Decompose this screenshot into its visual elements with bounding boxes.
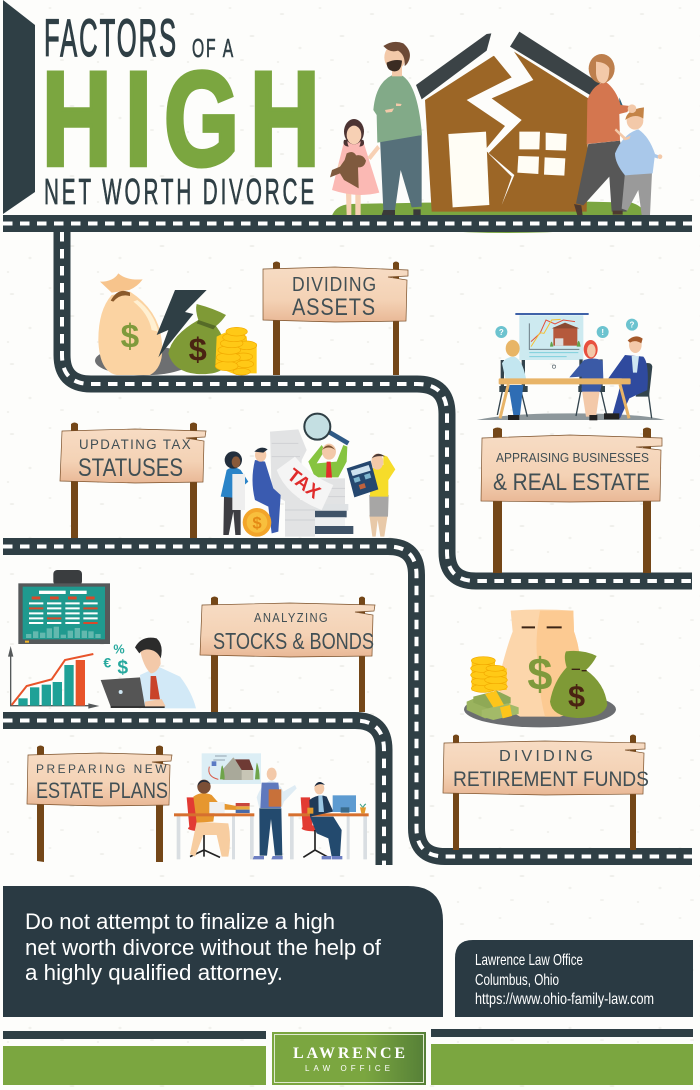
road: lower [3, 720, 384, 865]
illustration: retirement funds money [464, 609, 616, 727]
growth chart [8, 646, 99, 709]
heading: high: HIGH [42, 43, 320, 194]
boy [615, 104, 662, 215]
title banner [3, 0, 320, 214]
footer bars left [3, 1031, 266, 1085]
sign: dividing assets: ASSETS [292, 294, 376, 321]
sign: appraising businesses and real estate: & REAL ESTATE [493, 469, 650, 496]
illustration: money bags and lightning: $ [121, 318, 140, 355]
question and exclamation bubbles [495, 319, 638, 338]
man [373, 42, 422, 215]
illustration: retirement funds money: $ [527, 648, 552, 699]
illustration: money bags and lightning [95, 273, 257, 375]
logo: lawrence law office: LAWRENCE [293, 1045, 406, 1062]
analyst with laptop [101, 638, 196, 708]
illustration: stock screen and analyst [8, 570, 196, 709]
contact panel: Columbus, Ohio [475, 972, 559, 989]
heading: net worth divorce: NET WORTH DIVORCE [44, 171, 317, 212]
sign: appraising businesses and real estate: APPRAISING BUSINESSES [496, 450, 649, 465]
question and exclamation bubbles: ? [499, 328, 504, 337]
books [236, 803, 250, 813]
currency symbols: % [113, 642, 125, 656]
woman [574, 54, 630, 215]
sign: preparing new estate plans [27, 746, 172, 862]
illustration: meeting with property chart [477, 313, 665, 420]
heading: of a: OF A [192, 33, 235, 63]
woman in blue [221, 451, 248, 535]
sign: updating tax statuses: STATUSES [78, 454, 183, 482]
illustration: estate planning office [174, 753, 369, 859]
sign: dividing assets: DIVIDING [292, 274, 377, 296]
banner flag shape [3, 0, 35, 214]
stock board [18, 570, 110, 644]
seated woman [190, 780, 237, 857]
girl with teddy bear [330, 119, 380, 215]
illustration: family and broken house [330, 32, 662, 233]
illustration: money bags and lightning: $ [189, 331, 207, 368]
logo: lawrence law office [272, 1032, 426, 1085]
chair bases [190, 830, 328, 857]
standing man [253, 768, 297, 859]
sign: analyzing stocks and bonds: STOCKS & BONDS [213, 628, 374, 654]
tax note: TAX [284, 464, 325, 503]
sign: dividing retirement funds [443, 734, 649, 850]
sign: appraising businesses and real estate [481, 428, 662, 573]
road: winding to appraising [62, 232, 692, 581]
sign: dividing assets [263, 262, 408, 375]
man in blue suit [252, 448, 281, 533]
cash stacks [467, 691, 519, 720]
illustration: people with tax paperwork [221, 414, 395, 537]
road: winding to retirement [3, 546, 692, 856]
magnifier [304, 414, 348, 443]
logo: lawrence law office: LAW OFFICE [305, 1064, 392, 1073]
woman with calculator [347, 454, 395, 537]
contact panel: Lawrence Law Office [475, 952, 583, 969]
sign: updating tax statuses: UPDATING TAX [79, 436, 192, 452]
person in green [308, 444, 347, 478]
road: top [3, 215, 692, 232]
sign: analyzing stocks and bonds [200, 596, 375, 712]
sign: dividing retirement funds: DIVIDING [499, 748, 596, 765]
desks [177, 816, 367, 859]
sign: preparing new estate plans: PREPARING NEW [36, 762, 169, 776]
callout: attorney advice panel: Do not attempt to finalize a high [25, 909, 335, 934]
sign: analyzing stocks and bonds: ANALYZING [254, 611, 329, 625]
callout: attorney advice panel: net worth divorce without the help of [25, 935, 382, 960]
sign: dividing retirement funds: RETIREMENT FUNDS [453, 768, 649, 791]
question and exclamation bubbles: ! [601, 328, 604, 337]
road network [3, 224, 692, 865]
title banner: FACTORS [44, 9, 178, 68]
coin [243, 508, 271, 537]
sign: preparing new estate plans: ESTATE PLANS [36, 778, 168, 803]
callout: attorney advice panel [3, 886, 443, 1017]
footer bars right [431, 1029, 693, 1085]
contact panel [455, 940, 693, 1017]
chairs [187, 797, 328, 831]
seated man at computer [307, 782, 366, 859]
callout: attorney advice panel: a highly qualified attorney. [25, 960, 283, 985]
sign: updating tax statuses [60, 422, 206, 538]
house plan panel [202, 753, 261, 784]
question and exclamation bubbles: ? [630, 321, 635, 330]
currency symbols: $ [117, 657, 128, 678]
currency symbols [103, 642, 128, 678]
people at table [502, 336, 648, 420]
contact panel: https://www.ohio-family-law.com [475, 991, 654, 1008]
coin: $ [252, 514, 262, 533]
currency symbols: € [103, 654, 111, 670]
illustration: retirement funds money: $ [568, 680, 585, 714]
tax note [277, 457, 333, 510]
